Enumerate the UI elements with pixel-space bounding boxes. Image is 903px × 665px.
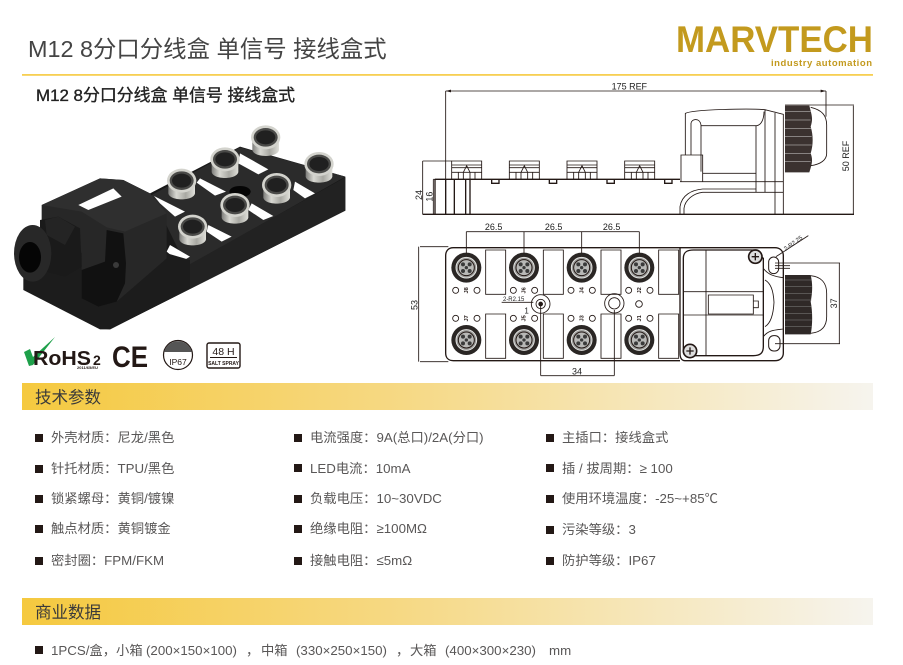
dimension: 26.5 spacings: 26.5 (603, 222, 620, 232)
spec column 1 (35, 429, 174, 568)
dimension: 26.5 spacings: 26.5 (545, 222, 562, 232)
terminal housing and gland (14, 178, 190, 329)
commercial data line: 1PCS/盒，小箱 (51, 642, 143, 658)
dimension: 50 REF: 50 REF (841, 140, 851, 171)
base plate (23, 237, 190, 329)
white label (78, 188, 122, 210)
terminal housing top (680, 248, 783, 361)
dimension: 53: 53 (409, 300, 419, 310)
icon: 48H salt spray: SALT SPRAY (208, 361, 240, 367)
M12 ports (451, 253, 654, 355)
port labels and LEDs: J1 (637, 315, 643, 321)
icon: RoHS 2: RoHS (33, 348, 91, 370)
screw (113, 262, 119, 268)
cable opening (19, 242, 41, 273)
dimension: 34 (541, 361, 614, 376)
base plate outline (423, 179, 854, 214)
port labels and LEDs: J5 (522, 315, 528, 321)
dimension: 37 (775, 263, 840, 344)
port labels and LEDs: J6 (522, 287, 528, 293)
icon: RoHS 2: 2 (93, 352, 101, 368)
top view drawing (409, 222, 840, 376)
port labels and LEDs: J4 (579, 286, 585, 293)
section header: technical parameters: 技术参数 (35, 388, 102, 407)
icon: IP67 (164, 340, 192, 370)
port labels and LEDs: J2 (637, 287, 643, 293)
white label strips (154, 153, 315, 263)
commercial data line: (400×300×230) (445, 643, 536, 658)
note: 2-R2.25: 2-R2.25 (783, 235, 805, 253)
dimension: 175 REF (423, 81, 826, 214)
spec text: 针托材质：TPU/黑色 (51, 460, 174, 476)
side view drawing (414, 81, 854, 214)
bullets (35, 434, 43, 565)
gland hex face (45, 217, 75, 245)
title: M12 8分口分线盒 单信号 接线盒式 (28, 36, 387, 62)
mounting holes: 1 (524, 306, 529, 315)
spec column 3 (546, 429, 718, 568)
commercial data line: ， (246, 643, 259, 658)
spec text: 密封圈：FPM/FKM (51, 552, 164, 568)
dimension: 50 REF (841, 106, 853, 214)
icon: CE mark: CE (112, 341, 148, 374)
section header: commercial data (22, 598, 873, 625)
housing side recess (82, 230, 126, 307)
cable gland (785, 275, 827, 334)
dimension: 26.5 spacings (466, 222, 639, 253)
spec text: 污染等级：3 (562, 521, 636, 537)
dimension: 175 REF: 175 REF (612, 81, 648, 91)
housing (42, 178, 167, 307)
port labels and LEDs (453, 286, 653, 321)
connectors side profile (452, 161, 655, 179)
spec text (51, 429, 174, 568)
spec text: LED电流：10mA (310, 461, 411, 476)
dimension: 24 / 16: 24 (414, 190, 424, 200)
terminal housing side (680, 109, 783, 214)
product photo: M12 junction box (14, 125, 345, 329)
commercial data line: 大箱 (410, 643, 437, 658)
dimension: 24 / 16: 16 (425, 192, 435, 202)
spec text: 使用环境温度：-25~+85℃ (562, 490, 718, 506)
gland body (14, 225, 51, 282)
logo: MARVTECH: industry automation (771, 58, 872, 69)
cable gland nut (785, 105, 854, 172)
dimension: 53 (409, 247, 419, 362)
icon: 48H salt spray: 48 H (212, 346, 235, 358)
commercial data line (35, 642, 571, 658)
connectors (167, 125, 334, 245)
subtitle: M12 8分口分线盒 单信号 接线盒式 (36, 86, 295, 105)
port labels and LEDs: J7 (464, 315, 470, 321)
icon: IP67: IP67 (169, 357, 187, 367)
dimension: 26.5 spacings: 26.5 (485, 222, 502, 232)
note: 2-R2.25 (776, 235, 808, 257)
icon: RoHS 2 (24, 337, 101, 370)
bullets (294, 434, 302, 565)
commercial data line: ， (396, 643, 409, 658)
spec text: 电流强度：9A(总口)/2A(分口) (310, 430, 484, 445)
spec column 2 (294, 430, 484, 568)
logo: MARVTECH: MARVTECH (676, 19, 873, 60)
bullets (546, 434, 554, 565)
dimension: 24 / 16 (414, 190, 435, 202)
port labels and LEDs: J3 (579, 315, 585, 321)
header rule (22, 74, 873, 76)
spec text: 绝缘电阻：≥100MΩ (310, 521, 427, 536)
spec text (310, 430, 484, 568)
spec text: 锁紧螺母：黄铜/镀镍 (51, 490, 174, 506)
section header: technical parameters (22, 383, 873, 410)
spec text: 外壳材质：尼龙/黑色 (51, 429, 174, 445)
mounting holes (502, 294, 624, 361)
housing top face (42, 178, 167, 232)
dimension: 34: 34 (572, 366, 582, 376)
box body (100, 147, 345, 329)
dimension: 37: 37 (829, 298, 839, 308)
gland nut (40, 217, 82, 277)
icon: 48H salt spray (207, 343, 240, 368)
spec text: 负载电压：10~30VDC (310, 491, 442, 506)
spec text: 防护等级：IP67 (562, 552, 656, 568)
centre hole (229, 186, 251, 197)
commercial data line: 中箱 (261, 643, 288, 658)
mounting holes: 2-R2.15 (503, 297, 525, 303)
commercial data line: (200×150×100) (146, 643, 237, 658)
icon: RoHS 2: 2011/65/EU (77, 365, 98, 370)
section header: commercial data: 商业数据 (35, 603, 101, 622)
commercial data line: mm (549, 643, 571, 658)
spec text: 触点材质：黄铜镀金 (51, 520, 171, 536)
commercial data line: (330×250×150) (296, 643, 387, 658)
spec text: 主插口：接线盒式 (562, 429, 668, 445)
spec text: 接触电阻：≤5mΩ (310, 552, 412, 568)
spec text: 插 / 拔周期：≥ 100 (562, 461, 673, 476)
distribution body outline (420, 247, 680, 362)
certification icons (24, 337, 240, 374)
spec text (562, 429, 718, 568)
port labels and LEDs: J8 (464, 287, 470, 293)
